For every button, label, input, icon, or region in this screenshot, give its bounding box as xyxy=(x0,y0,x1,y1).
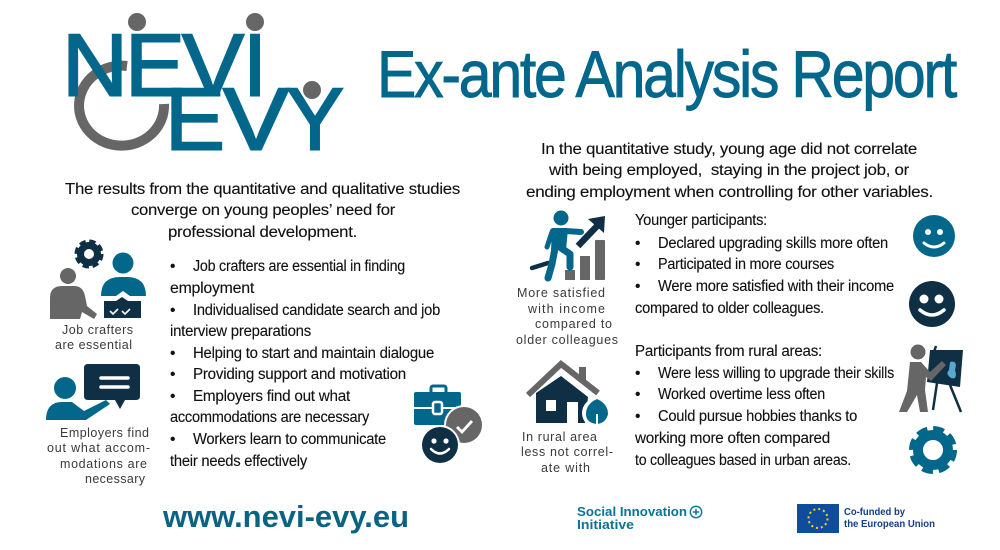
text block: left introduction: The results from the quantitative and qualitative studies xyxy=(65,181,461,198)
logo: NEVI EVY: E xyxy=(165,70,225,168)
text block: left introduction: converge on young peoples’ need for xyxy=(131,202,395,219)
icon: job crafters xyxy=(50,242,146,319)
text block: right introduction: with being employed, staying in the project job, or xyxy=(548,162,909,179)
text block: participants from rural areas: working more often compared xyxy=(634,430,830,447)
logo: EU flag and co-funded text xyxy=(797,504,935,533)
logo: NEVI EVY: N xyxy=(62,16,128,114)
icon: teal smile xyxy=(913,215,955,257)
caption: more satisfied with income: older colleagues xyxy=(516,333,618,347)
logo: NEVI EVY: I xyxy=(243,16,267,114)
caption: job crafters xyxy=(55,323,133,352)
caption: rural area: ate with xyxy=(541,461,590,475)
icon: briefcase with check and smile xyxy=(414,386,484,465)
text block: left introduction xyxy=(65,181,461,241)
logo: Social Innovation Initiative: Social Innovation xyxy=(577,504,687,519)
bullet list: professional development: • xyxy=(170,345,175,362)
bullet list: professional development: Helping to start and maintain dialogue xyxy=(193,345,434,362)
text block: left introduction: professional development. xyxy=(168,224,357,241)
text block: younger participants: compared to older colleagues. xyxy=(635,300,824,317)
caption: employers: out what accom- xyxy=(47,441,150,455)
logo: NEVI EVY: Y xyxy=(286,70,344,168)
text block: younger participants: Participated in more courses xyxy=(658,256,834,273)
bullet list: professional development: • xyxy=(170,366,175,383)
icon: employers speech bubble xyxy=(46,364,140,420)
logo: NEVI EVY xyxy=(62,13,344,168)
caption: more satisfied with income: More satisfied xyxy=(517,286,605,300)
bullet list: professional development: Providing support and motivation xyxy=(193,366,406,383)
website link: www.nevi-evy.eu xyxy=(162,499,409,534)
text block: younger participants: • xyxy=(635,256,640,273)
text block: participants from rural areas: • xyxy=(635,408,640,425)
bullet list: professional development: interview preparations xyxy=(170,323,311,340)
bullet list: professional development: their needs effectively xyxy=(170,453,307,470)
bullet list: professional development: • xyxy=(170,388,175,405)
bullet list: professional development: • xyxy=(170,302,175,319)
logo: Social Innovation Initiative: Initiative xyxy=(577,517,634,532)
caption: job crafters: are essential xyxy=(55,338,132,352)
caption: rural area: less not correl- xyxy=(521,445,613,459)
bullet list: professional development: Individualised candidate search and job xyxy=(193,302,440,319)
text block: younger participants: • xyxy=(635,278,640,295)
caption: employers: modations are xyxy=(60,457,147,471)
bullet list: professional development xyxy=(170,258,440,470)
caption: employers xyxy=(47,426,150,486)
caption: more satisfied with income: compared to xyxy=(535,317,612,331)
logo: EU flag and co-funded text: the European Union xyxy=(844,519,935,530)
text block: participants from rural areas: Participants from rural areas: xyxy=(635,343,822,360)
text block: younger participants: Were more satisfied with their income xyxy=(658,278,894,295)
caption: job crafters: Job crafters xyxy=(62,323,133,337)
text block: participants from rural areas: • xyxy=(635,365,640,382)
text block: participants from rural areas: • xyxy=(635,386,640,403)
icon: gear xyxy=(912,430,954,470)
caption: employers: Employers find xyxy=(60,426,149,440)
logo: Social Innovation Initiative xyxy=(577,504,702,532)
bullet list: professional development: accommodations are necessary xyxy=(170,409,369,426)
text block: younger participants xyxy=(635,212,894,317)
caption: employers: necessary xyxy=(85,472,146,486)
bullet list: professional development: employment xyxy=(170,280,255,297)
bullet list: professional development: Employers find out what xyxy=(193,388,351,405)
icon: climbing figure with rising bars xyxy=(532,210,605,280)
text block: younger participants: • xyxy=(635,235,640,252)
logo: NEVI EVY: V xyxy=(182,16,244,114)
text block: right introduction: In the quantitative study, young age did not correlate xyxy=(541,141,917,158)
icon: rural house xyxy=(528,364,612,428)
text block: participants from rural areas: to colleagues based in urban areas. xyxy=(635,452,851,469)
text block: participants from rural areas xyxy=(634,343,894,469)
icon: painter at easel xyxy=(899,344,963,412)
bullet list: professional development: • xyxy=(170,431,175,448)
text block: participants from rural areas: Were less willing to upgrade their skills xyxy=(658,365,894,382)
text block: right introduction xyxy=(526,141,933,201)
caption: rural area: In rural area xyxy=(522,430,597,444)
caption: rural area xyxy=(521,430,613,475)
text block: right introduction: ending employment when controlling for other variables. xyxy=(526,184,933,201)
icon: dark smile xyxy=(909,281,955,327)
logo: NEVI EVY: V xyxy=(223,70,289,168)
bullet list: professional development: Job crafters are essential in finding xyxy=(193,258,405,275)
bullet list: professional development: Workers learn to communicate xyxy=(193,431,386,448)
logo: NEVI EVY: E xyxy=(125,16,185,114)
caption: more satisfied with income: with income xyxy=(527,302,605,316)
text block: participants from rural areas: Worked overtime less often xyxy=(658,386,825,403)
text block: younger participants: Younger participants: xyxy=(635,212,767,229)
bullet list: professional development: • xyxy=(170,258,175,275)
logo: EU flag and co-funded text: Co-funded by xyxy=(844,507,905,518)
text block: participants from rural areas: Could pursue hobbies thanks to xyxy=(658,408,857,425)
caption: more satisfied with income xyxy=(516,286,618,347)
text block: younger participants: Declared upgrading skills more often xyxy=(658,235,888,252)
